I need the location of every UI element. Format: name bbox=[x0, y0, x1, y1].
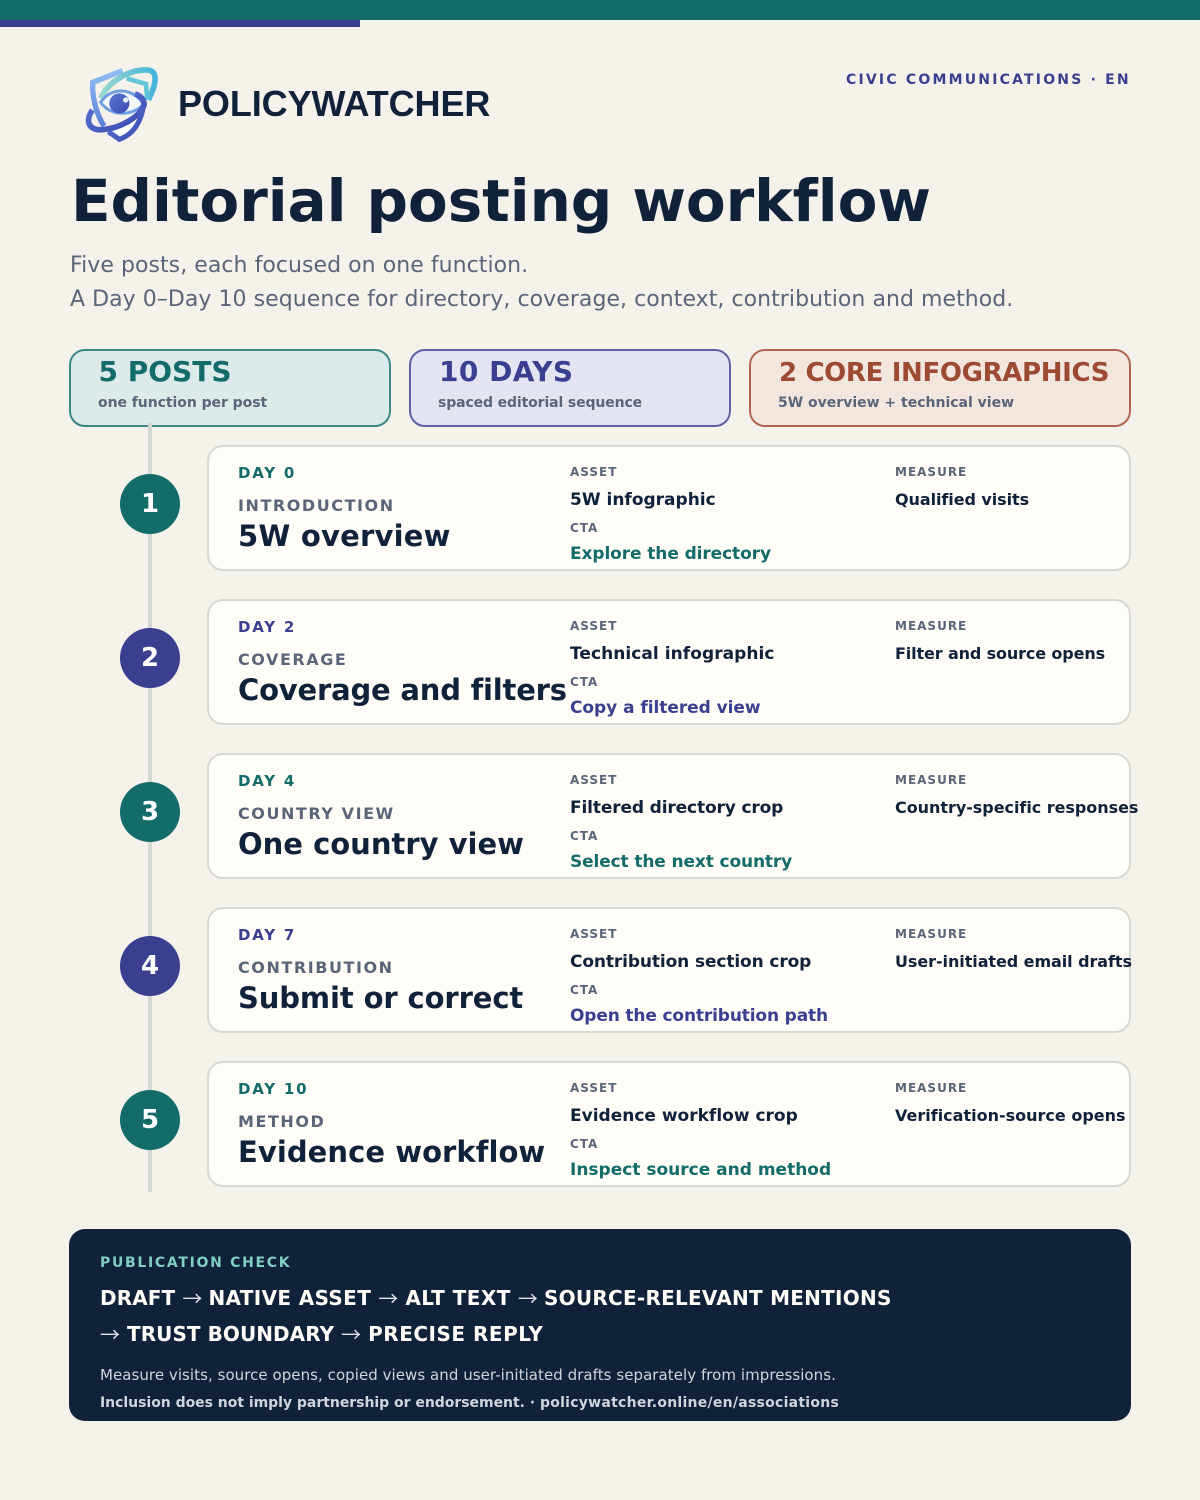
step 2 card: ASSET bbox=[570, 619, 617, 633]
step 1 card: MEASURE bbox=[895, 465, 967, 479]
step 2 card: DAY 2 bbox=[238, 618, 296, 636]
subtitle: Five posts, each focused on one function. bbox=[70, 253, 528, 278]
section tag: CIVIC COMMUNICATIONS · EN bbox=[846, 72, 1131, 88]
step 3 card: ASSET bbox=[570, 773, 617, 787]
title: Editorial posting workflow bbox=[71, 167, 931, 235]
step 4 card: MEASURE bbox=[895, 927, 967, 941]
step 5 card: Inspect source and method bbox=[570, 1160, 831, 1180]
step 3 card: Filtered directory crop bbox=[570, 798, 783, 818]
timeline line bbox=[148, 423, 152, 1192]
step 1 card: DAY 0 bbox=[238, 464, 296, 482]
stat: 5 posts bbox=[69, 349, 391, 427]
step 4 number bbox=[120, 936, 180, 996]
step 5 card: DAY 10 bbox=[238, 1080, 308, 1098]
stat: 10 days bbox=[409, 349, 731, 427]
step 2 number: 2 bbox=[141, 643, 159, 673]
stat: 2 core infographics bbox=[749, 349, 1131, 427]
step 3 card: CTA bbox=[570, 829, 598, 843]
step 2 card: MEASURE bbox=[895, 619, 967, 633]
step 1 card: 5W overview bbox=[238, 519, 451, 553]
step 2 card: COVERAGE bbox=[238, 650, 347, 669]
step 1 card: Qualified visits bbox=[895, 490, 1029, 509]
step 3 card: MEASURE bbox=[895, 773, 967, 787]
step 2 card: Technical infographic bbox=[570, 644, 775, 664]
step 5 card: Evidence workflow crop bbox=[570, 1106, 798, 1126]
publication steps line 2: → TRUST BOUNDARY → PRECISE REPLY bbox=[100, 1319, 543, 1348]
step 5 card: MEASURE bbox=[895, 1081, 967, 1095]
step 4 number: 4 bbox=[141, 951, 159, 981]
step 3 card: Country-specific responses bbox=[895, 798, 1138, 817]
step 2 card: CTA bbox=[570, 675, 598, 689]
step 1 number bbox=[120, 474, 180, 534]
brand name: POLICYWATCHER bbox=[178, 83, 490, 124]
step 1 card: 5W infographic bbox=[570, 490, 716, 510]
stat: 10 days: 10 DAYS bbox=[439, 355, 574, 388]
step 5 number bbox=[120, 1090, 180, 1150]
step 5 card bbox=[207, 1061, 1131, 1187]
panel: publication check bbox=[69, 1229, 1131, 1421]
step 4 card: Contribution section crop bbox=[570, 952, 811, 972]
step 3 card: Select the next country bbox=[570, 852, 792, 872]
step 1 card bbox=[207, 445, 1131, 571]
stat: 2 core infographics: 5W overview + technical view bbox=[778, 395, 1014, 411]
step 4 card: CTA bbox=[570, 983, 598, 997]
logo: PolicyWatcher shield and eye bbox=[86, 67, 158, 142]
publication steps line 1: DRAFT → NATIVE ASSET → ALT TEXT → SOURCE-RELEVANT MENTIONS bbox=[100, 1283, 892, 1312]
step 3 card: One country view bbox=[238, 827, 524, 861]
step 3 number bbox=[120, 782, 180, 842]
step 1 card: CTA bbox=[570, 521, 598, 535]
step 2 card bbox=[207, 599, 1131, 725]
publication check heading: PUBLICATION CHECK bbox=[100, 1255, 291, 1271]
step 2 card: Coverage and filters bbox=[238, 673, 567, 707]
step 5 card: ASSET bbox=[570, 1081, 617, 1095]
top teal bar bbox=[0, 0, 1200, 20]
disclaimer: Inclusion does not imply partnership or endorsement. · policywatcher.online/en/associations bbox=[100, 1395, 839, 1411]
subtitle bbox=[70, 253, 1013, 312]
stat: 5 posts: 5 POSTS bbox=[98, 355, 232, 388]
step 4 card: Open the contribution path bbox=[570, 1006, 828, 1026]
measurement note: Measure visits, source opens, copied views and user-initiated drafts separately from impressions. bbox=[100, 1366, 836, 1384]
step 1 card: ASSET bbox=[570, 465, 617, 479]
step 4 card: ASSET bbox=[570, 927, 617, 941]
step 1 card: INTRODUCTION bbox=[238, 496, 395, 515]
step 5 number: 5 bbox=[141, 1105, 159, 1135]
step 3 number: 3 bbox=[141, 797, 159, 827]
step 2 card: Filter and source opens bbox=[895, 644, 1105, 663]
stat: 5 posts: one function per post bbox=[98, 395, 267, 411]
step 1 number: 1 bbox=[141, 489, 159, 519]
stat: 2 core infographics: 2 CORE INFOGRAPHICS bbox=[779, 358, 1109, 388]
step 4 card: CONTRIBUTION bbox=[238, 958, 394, 977]
step 5 card: Verification-source opens bbox=[895, 1106, 1126, 1125]
step 4 card: Submit or correct bbox=[238, 981, 523, 1015]
step 1 card: Explore the directory bbox=[570, 544, 771, 564]
step 4 card bbox=[207, 907, 1131, 1033]
stat: 10 days: spaced editorial sequence bbox=[438, 395, 642, 411]
step 5 card: METHOD bbox=[238, 1112, 325, 1131]
step 2 number bbox=[120, 628, 180, 688]
step 3 card: COUNTRY VIEW bbox=[238, 804, 395, 823]
subtitle: A Day 0–Day 10 sequence for directory, coverage, context, contribution and method. bbox=[70, 287, 1013, 312]
step 3 card bbox=[207, 753, 1131, 879]
step 5 card: CTA bbox=[570, 1137, 598, 1151]
step 4 card: User-initiated email drafts bbox=[895, 952, 1132, 971]
step 4 card: DAY 7 bbox=[238, 926, 296, 944]
step 5 card: Evidence workflow bbox=[238, 1135, 545, 1169]
top indigo accent bar bbox=[0, 20, 360, 27]
step 2 card: Copy a filtered view bbox=[570, 698, 761, 718]
step 3 card: DAY 4 bbox=[238, 772, 296, 790]
